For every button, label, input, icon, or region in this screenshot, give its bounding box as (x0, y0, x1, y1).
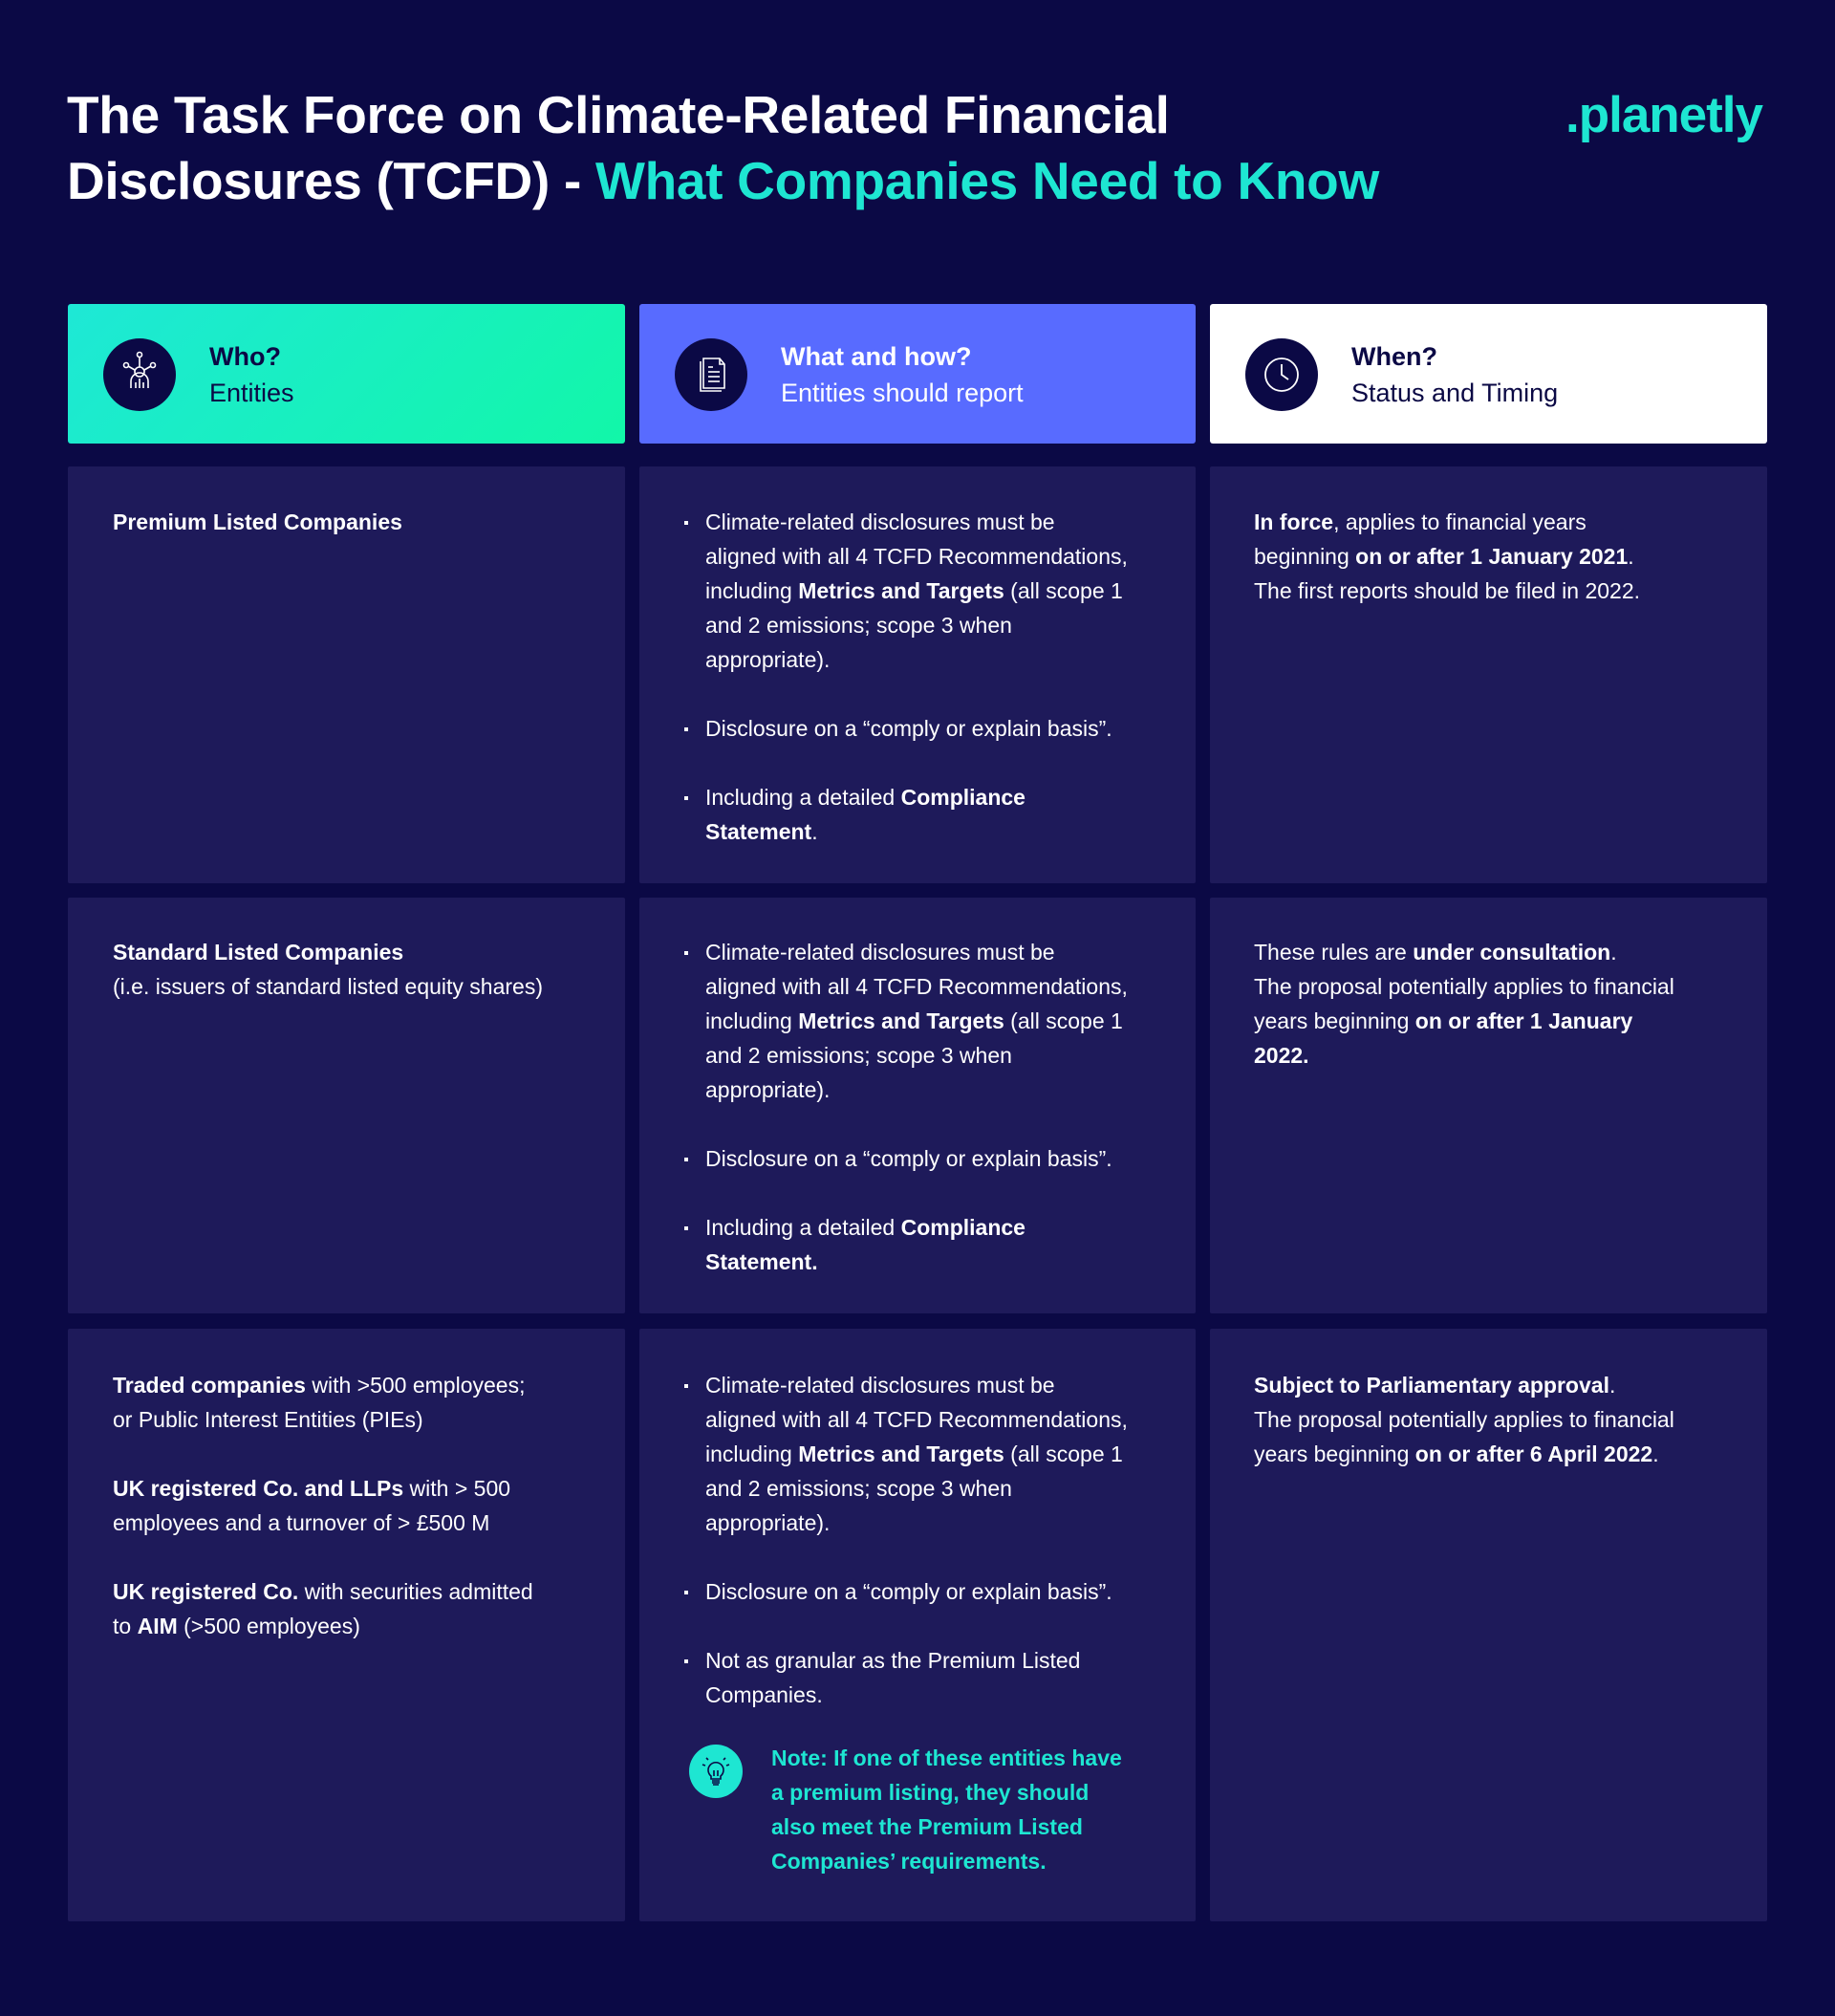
header: when (1210, 304, 1767, 444)
row1 what: and 2 emissions; scope 3 when (705, 613, 1012, 638)
row1 when: The first reports should be filed in 2022. (1254, 578, 1640, 603)
note text: also meet the Premium Listed (771, 1814, 1083, 1839)
callout: note (689, 1745, 1122, 1874)
row3 when: years beginning on or after 6 April 2022. (1254, 1442, 1659, 1466)
note text: a premium listing, they should (771, 1780, 1089, 1805)
row2 when: 2022. (1254, 1043, 1309, 1068)
note text: Note: If one of these entities have (771, 1745, 1122, 1770)
row3 what: Not as granular as the Premium Listed (705, 1648, 1080, 1673)
row3 who (68, 1329, 625, 1921)
row2 what: Climate-related disclosures must be (705, 940, 1055, 965)
icon: document (675, 338, 747, 411)
row2 what: Disclosure on a “comply or explain basis”. (705, 1146, 1112, 1171)
heading: Entities (209, 379, 294, 407)
row1 when: beginning on or after 1 January 2021. (1254, 544, 1634, 569)
row3 when: Subject to Parliamentary approval. (1254, 1373, 1615, 1398)
row2 what: appropriate). (705, 1077, 830, 1102)
heading: What and how? (781, 342, 971, 371)
row2 when: These rules are under consultation. (1254, 940, 1617, 965)
row1 who (68, 466, 625, 883)
heading: Entities should report (781, 379, 1024, 407)
icon: people network (103, 338, 176, 411)
row2 who: (i.e. issuers of standard listed equity shares) (113, 974, 543, 999)
row2 what: Statement. (705, 1249, 818, 1274)
row3 when (1210, 1329, 1767, 1921)
row3 who: Traded companies with >500 employees; (113, 1373, 525, 1398)
heading: Who? (209, 342, 281, 371)
row2 who: Standard Listed Companies (113, 940, 403, 965)
row3 who: UK registered Co. with securities admitted (113, 1579, 533, 1604)
logo: .planetly (1565, 87, 1762, 143)
row2 when: years beginning on or after 1 January (1254, 1008, 1632, 1033)
title (67, 85, 1380, 210)
heading (781, 342, 1024, 407)
row3 what: Disclosure on a “comply or explain basis”. (705, 1579, 1112, 1604)
title: The Task Force on Climate-Related Financial (67, 85, 1170, 144)
row3 who: UK registered Co. and LLPs with > 500 (113, 1476, 510, 1501)
row2 what (639, 898, 1196, 1313)
row3 what: aligned with all 4 TCFD Recommendations, (705, 1407, 1128, 1432)
row2 who (68, 898, 625, 1313)
row3 what: Companies. (705, 1682, 823, 1707)
row1 what: appropriate). (705, 647, 830, 672)
row3 what: including Metrics and Targets (all scope 1 (705, 1442, 1123, 1466)
row2 what: Including a detailed Compliance (705, 1215, 1025, 1240)
row3 what: Climate-related disclosures must be (705, 1373, 1055, 1398)
note text: Companies’ requirements. (771, 1849, 1047, 1874)
header: what (639, 304, 1196, 444)
row2 what: aligned with all 4 TCFD Recommendations, (705, 974, 1128, 999)
row3 what (639, 1329, 1196, 1921)
row1 what: Including a detailed Compliance (705, 785, 1025, 810)
header: who (68, 304, 625, 444)
heading (209, 342, 294, 407)
row2 when: The proposal potentially applies to financial (1254, 974, 1674, 999)
row3 who: or Public Interest Entities (PIEs) (113, 1407, 423, 1432)
row1 what: Statement. (705, 819, 818, 844)
row1 what: aligned with all 4 TCFD Recommendations, (705, 544, 1128, 569)
row1 what: Climate-related disclosures must be (705, 509, 1055, 534)
row3 what: and 2 emissions; scope 3 when (705, 1476, 1012, 1501)
row1 when (1210, 466, 1767, 883)
icon: clock (1245, 338, 1318, 411)
heading (1351, 342, 1558, 407)
row2 when (1210, 898, 1767, 1313)
row2 what: and 2 emissions; scope 3 when (705, 1043, 1012, 1068)
heading: When? (1351, 342, 1437, 371)
row3 what: appropriate). (705, 1510, 830, 1535)
row3 who: employees and a turnover of > £500 M (113, 1510, 489, 1535)
title: Disclosures (TCFD) - What Companies Need to Know (67, 151, 1379, 210)
icon: lightbulb (689, 1745, 743, 1798)
row1 what (639, 466, 1196, 883)
note text (771, 1745, 1122, 1874)
row1 what: Disclosure on a “comply or explain basis”. (705, 716, 1112, 741)
row1 when: In force, applies to financial years (1254, 509, 1587, 534)
row2 what: including Metrics and Targets (all scope 1 (705, 1008, 1123, 1033)
row1 who: Premium Listed Companies (113, 509, 402, 534)
row3 when: The proposal potentially applies to financial (1254, 1407, 1674, 1432)
row1 what: including Metrics and Targets (all scope 1 (705, 578, 1123, 603)
row3 who: to AIM (>500 employees) (113, 1614, 360, 1638)
heading: Status and Timing (1351, 379, 1558, 407)
